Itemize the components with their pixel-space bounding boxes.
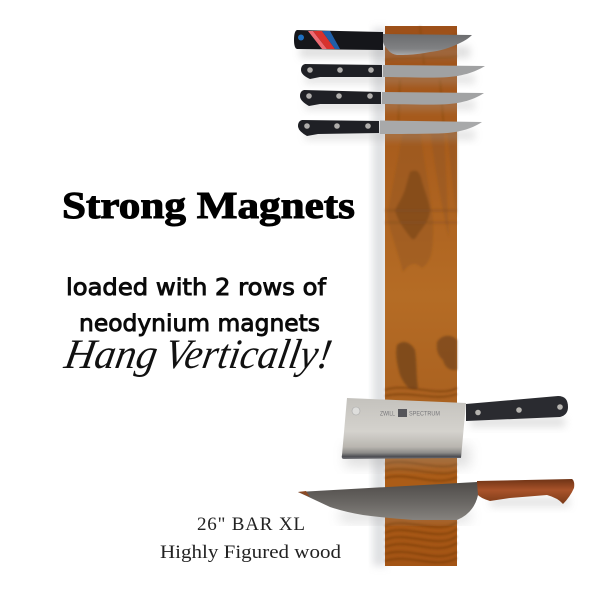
text: loaded with 2 rows of: loaded with 2 rows of: [66, 273, 327, 301]
text: Hang Vertically!: Vertically!: [161, 331, 335, 378]
knife: cleaver: [342, 396, 568, 467]
heading: Strong Magnets: Strong Magnets: [62, 185, 355, 227]
knife: chef knife with wooden handle: [298, 479, 574, 522]
wooden magnetic bar: [373, 26, 457, 566]
knife: cleaver: ZWILL: [380, 412, 396, 418]
text: Hang Vertically!: [60, 331, 335, 378]
knife: steak knife 1: [301, 64, 485, 84]
text: neodynium magnets: neodynium magnets: [79, 309, 320, 337]
caption: 26" BAR XL: 26" BAR XL: [197, 514, 305, 535]
knife: cleaver: SPECTRUM: [409, 412, 440, 418]
knife: steak knife 2: [300, 90, 484, 110]
text: Hang Vertically!: Hang: [60, 331, 161, 378]
knife: coloured handle paring knife: [294, 30, 472, 58]
caption: Highly Figured wood: Highly Figured wood: [160, 542, 342, 563]
knife: steak knife 3: [298, 120, 482, 140]
